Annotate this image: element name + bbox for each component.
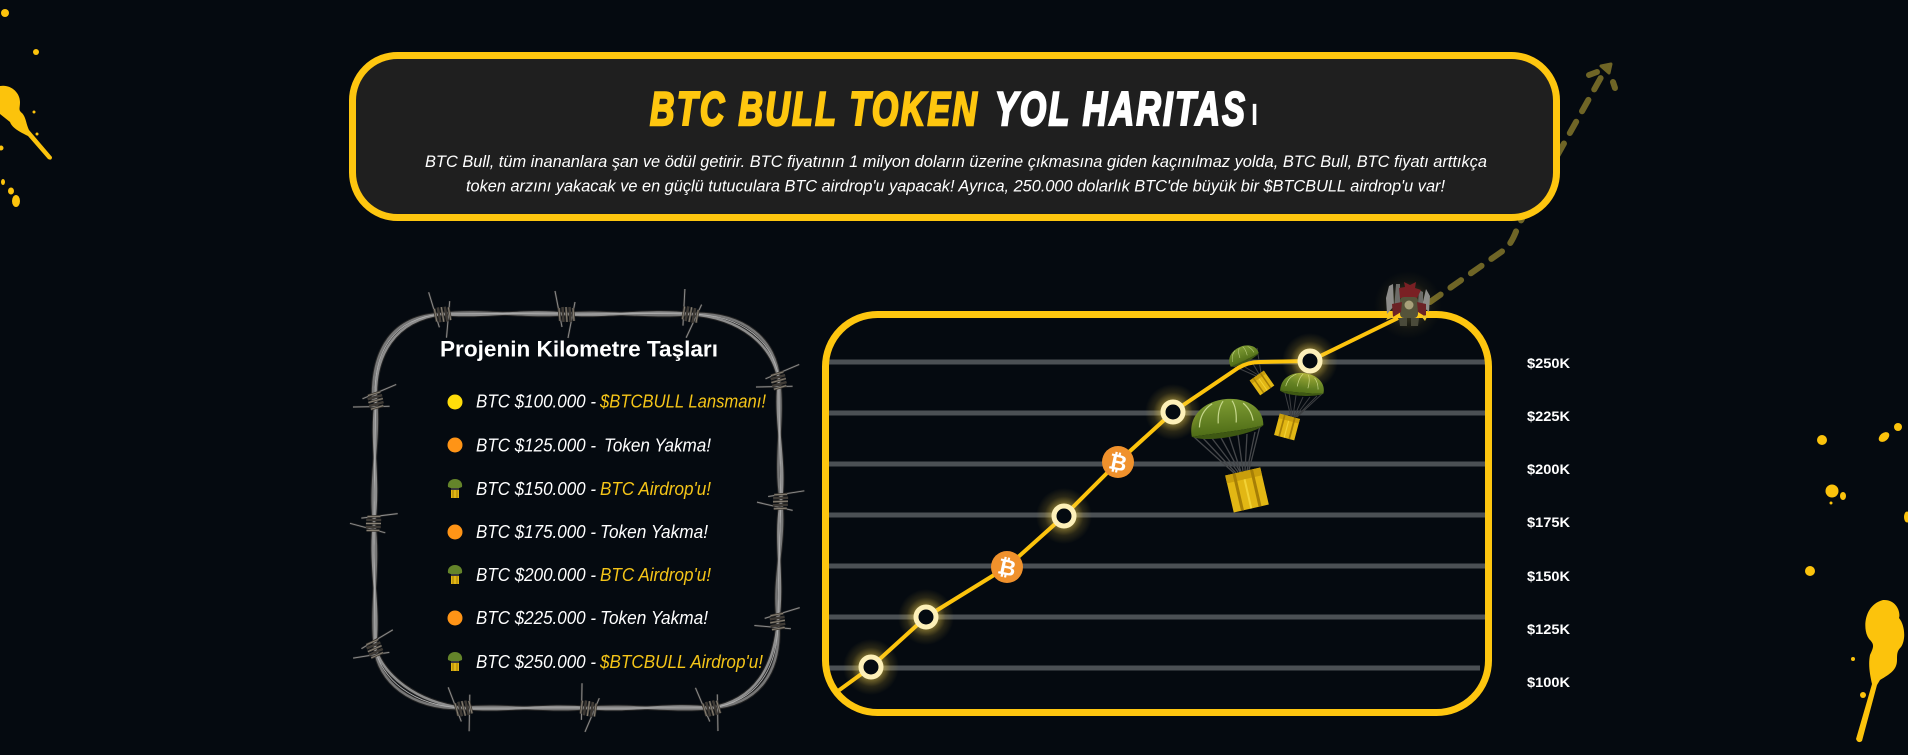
title: BTC BULL TOKEN (650, 83, 978, 135)
icon: bitcoin coin: ₿ (1106, 449, 1129, 478)
milestone 6 (448, 608, 708, 628)
milestone 3 (448, 479, 711, 499)
milestone 1 (448, 392, 766, 412)
milestone node 125K (898, 589, 954, 645)
chart: price roadmap (826, 314, 1488, 712)
milestone 7: BTC $250.000 - (476, 652, 596, 672)
intro text: BTC Bull, tüm inananlara şan ve ödül getirir. BTC fiyatının 1 milyon doların üzerine çıkmasına giden kaçınılmaz yolda, BTC Bull, BTC fiyatı arttıkça (425, 153, 1487, 171)
milestone 6: BTC $225.000 - (476, 608, 596, 628)
milestone 3: BTC $150.000 - (476, 479, 596, 499)
milestone 7 (448, 652, 763, 672)
chart axis labels: $100K (1527, 674, 1570, 690)
milestone 1: $BTCBULL Lansmanı! (599, 392, 766, 412)
milestones heading: Projenin Kilometre Taşları (440, 336, 718, 362)
panel: header (352, 56, 1556, 218)
chart axis labels: $225K (1527, 408, 1570, 424)
icon: bitcoin coin: ₿ (995, 554, 1018, 583)
milestone node 175K (1036, 488, 1092, 544)
icon: medium airdrop parachute (1274, 369, 1326, 440)
milestone 2 (448, 436, 711, 456)
arrow: dashed path to the moon (1430, 64, 1615, 302)
chart axis labels: $125K (1527, 621, 1570, 637)
milestone 4: Token Yakma! (600, 522, 708, 542)
chart axis labels: $150K (1527, 568, 1570, 584)
milestone 2: BTC $125.000 - (476, 436, 596, 456)
milestone 2: Token Yakma! (604, 436, 711, 456)
icon: small airdrop parachute (1225, 342, 1274, 395)
intro text (425, 153, 1487, 196)
icon: large airdrop parachute (1190, 397, 1269, 513)
milestone node 225K (1145, 384, 1201, 440)
intro text: token arzını yakacak ve en güçlü tutuculara BTC airdrop'u yapacak! Ayrıca, 250.000 dolarlık BTC'de büyük bir $BTCBULL airdrop'u var! (466, 178, 1445, 196)
milestone 1: BTC $100.000 - (476, 392, 596, 412)
splatter: right paint (1805, 423, 1908, 742)
panel: milestones barbed wire frame (349, 289, 804, 734)
icon: armoured bull mascot (1374, 271, 1442, 339)
icon: bitcoin coin (1102, 446, 1134, 478)
title: YOL HARITAS (995, 83, 1245, 135)
milestone 4: BTC $175.000 - (476, 522, 596, 542)
milestone 6: Token Yakma! (600, 608, 708, 628)
milestone 5: BTC Airdrop'u! (600, 565, 711, 585)
icon: bitcoin coin (991, 551, 1023, 583)
price line (838, 318, 1398, 691)
chart axis labels: $175K (1527, 514, 1570, 530)
milestone 3: BTC Airdrop'u! (600, 479, 711, 499)
chart axis labels: $200K (1527, 461, 1570, 477)
milestone node 250K (1282, 333, 1338, 389)
milestone 4 (448, 522, 708, 542)
title: ı (1249, 90, 1260, 134)
milestone 5 (448, 565, 711, 585)
milestone node 100K (843, 639, 899, 695)
milestone 7: $BTCBULL Airdrop'u! (599, 652, 763, 672)
title (650, 83, 1260, 135)
milestone 5: BTC $200.000 - (476, 565, 596, 585)
chart axis labels: $250K (1527, 355, 1570, 371)
chart axis labels (1527, 355, 1570, 690)
splatter: top left paint (0, 9, 52, 207)
